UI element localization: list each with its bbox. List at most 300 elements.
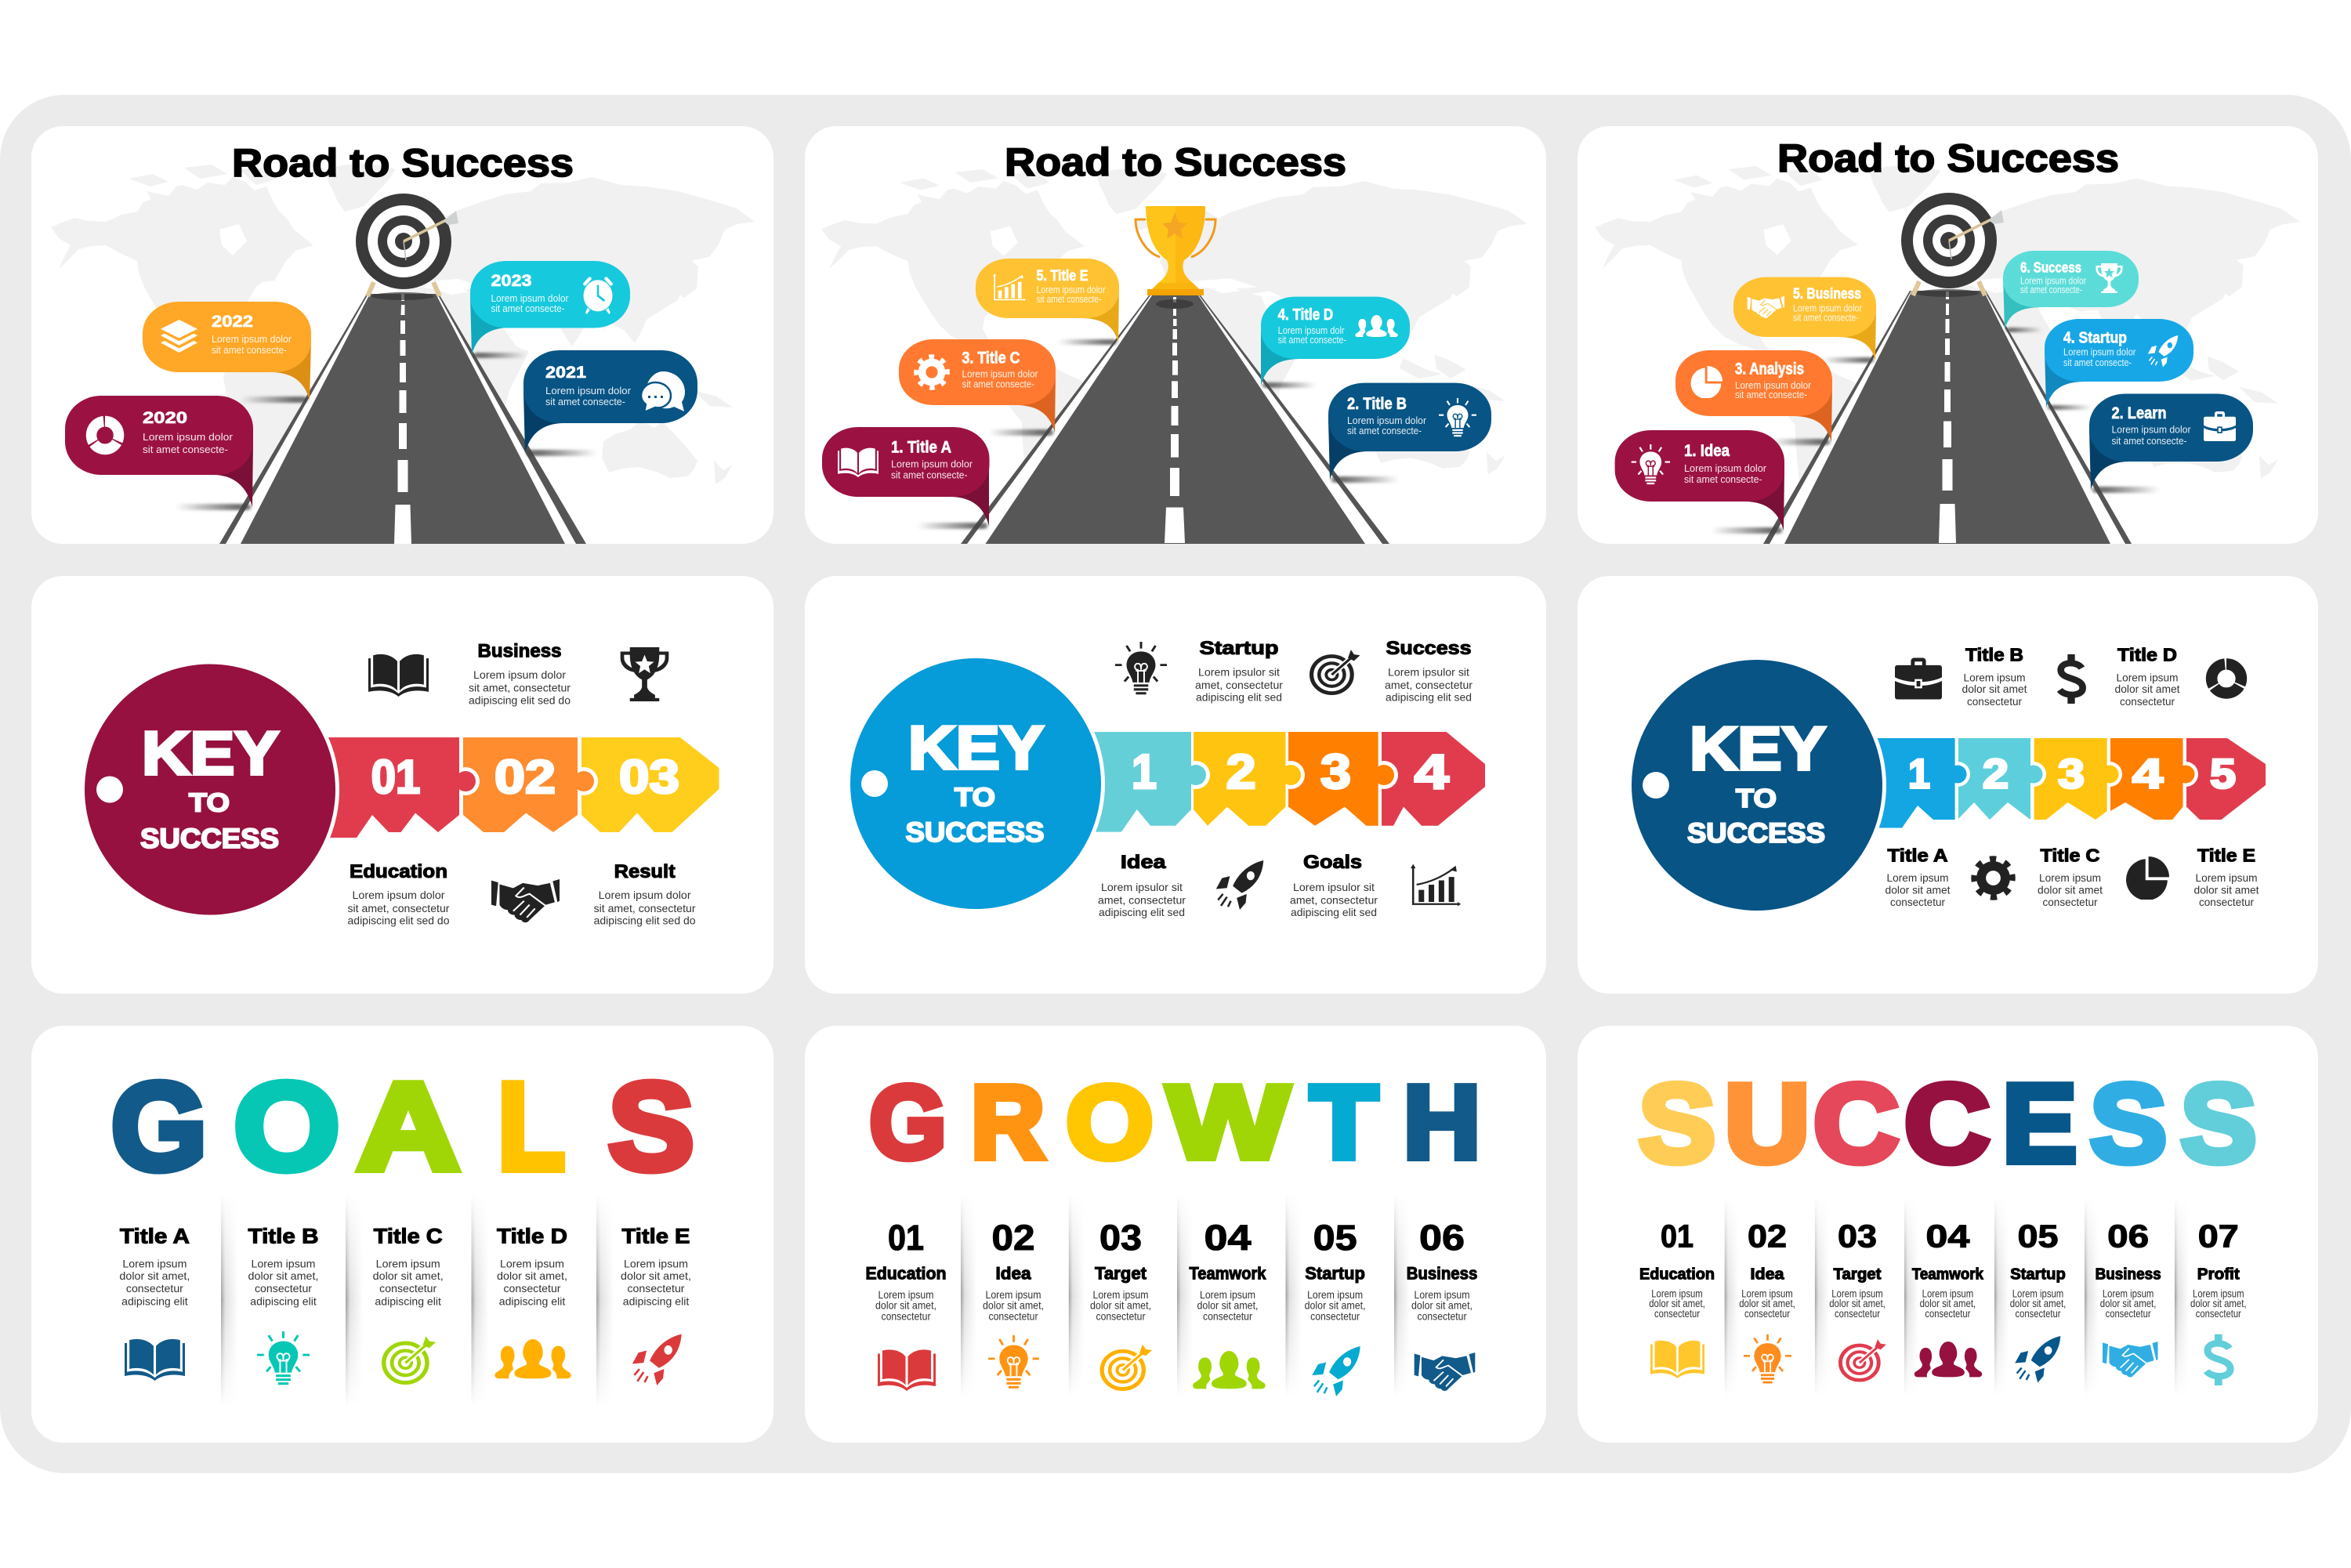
column: 06 business: 06 [1419, 1218, 1465, 1258]
icon: briefcase [1895, 658, 1942, 699]
column: 04 teamwork: Teamwork [1190, 1264, 1266, 1284]
column: 05 startup: Startup [2010, 1266, 2066, 1284]
text block: title E: Lorem ipsum [2196, 871, 2257, 884]
column: 03 target [1829, 1219, 1886, 1380]
text block: title A [1886, 845, 1951, 908]
column: 02 idea: Lorem ipsum [1741, 1287, 1793, 1299]
callout: startup [2045, 319, 2193, 410]
heading letters: GOALS: O [234, 1058, 340, 1196]
callout: title C: Lorem ipsum dolor [962, 368, 1038, 379]
column: title B: dolor sit amet, [248, 1269, 318, 1282]
text block: success: Success [1386, 638, 1472, 659]
text block: title A: dolor sit amet [1886, 884, 1951, 896]
text block: success: adipiscing elit sed [1386, 691, 1472, 704]
heading letters: GROWTH: H [1404, 1064, 1480, 1180]
column: 01 education: Education [865, 1264, 947, 1284]
text block: education [348, 861, 450, 926]
key head: SUCCESS [906, 817, 1044, 848]
column: 07 profit: Profit [2197, 1266, 2240, 1284]
column: 05 startup: dolor sit amet, [2010, 1297, 2066, 1309]
column: title E: Title E [622, 1224, 690, 1248]
heading letters: SUCCESS: S [1639, 1061, 1715, 1186]
column: 01 education: consectetur [1654, 1307, 1700, 1320]
key shaft [1628, 656, 2266, 914]
key head [1632, 660, 1882, 911]
column: 03 target: consectetur [1835, 1307, 1880, 1320]
road [961, 295, 1389, 544]
heading letters: GOALS: A [357, 1058, 459, 1196]
icon: pie [2126, 856, 2169, 900]
text block: business: Lorem ipsum dolor [473, 668, 566, 681]
panel: road to success with trophy [805, 126, 1546, 544]
callout: business: Lorem ipsum dolor [1793, 302, 1863, 313]
text block: success: amet, consectetur [1385, 679, 1473, 691]
text block: goals [1290, 852, 1378, 918]
callout: analysis: 3. Analysis [1735, 360, 1804, 378]
column: 01 education: dolor sit amet, [875, 1299, 936, 1312]
column: 01 education: 01 [1661, 1219, 1694, 1255]
callout: 2021: Lorem ipsum dolor [545, 385, 632, 397]
heading letters: GROWTH: T [1310, 1064, 1378, 1180]
column: 02 idea: 02 [1748, 1219, 1787, 1255]
icon: dollar [2059, 654, 2083, 704]
key head: KEY [142, 719, 279, 788]
column: 01 education: Lorem ipsum [878, 1288, 934, 1301]
heading: Road to Success [1005, 140, 1346, 184]
column: 07 profit [2190, 1219, 2247, 1385]
target icon [1901, 193, 2004, 295]
column: 07 profit: 07 [2198, 1219, 2239, 1255]
text block: title A: Lorem ipsum [1887, 871, 1948, 884]
callout: 2023: sit amet consecte- [491, 302, 564, 314]
column: title D: consectetur [503, 1282, 561, 1295]
road [219, 292, 586, 544]
column: title A: Title A [120, 1224, 190, 1248]
column: title E: dolor sit amet, [621, 1269, 691, 1282]
callout: title D [1261, 297, 1410, 388]
column: 07 profit: Lorem ipsum [2193, 1287, 2244, 1299]
text block: title E: Title E [2197, 845, 2255, 865]
key head: KEY [908, 713, 1044, 782]
column: 05 startup: Lorem ipsum [2012, 1287, 2063, 1299]
heading letters: GROWTH: O [1066, 1064, 1154, 1180]
callout: title A [822, 427, 989, 529]
column: title E: adipiscing elit [623, 1295, 689, 1308]
heading letters: SUCCESS: E [2002, 1061, 2077, 1186]
callout: title D: Lorem ipsum dolr [1278, 324, 1345, 336]
callout: title A: Lorem ipsum dolor [891, 458, 973, 469]
column: 06 business: Lorem ipsum [2103, 1287, 2154, 1299]
column: 02 idea: consectetur [1744, 1307, 1790, 1320]
column: 05 startup [1305, 1218, 1366, 1396]
text block: result: adipiscing elit sed do [594, 914, 696, 926]
text block: title D: Lorem ipsum [2116, 671, 2179, 683]
text block: title D: consectetur [2120, 695, 2175, 708]
heading letters: GOALS: G [111, 1058, 207, 1196]
column: 03 target: Lorem ipsum [1831, 1287, 1883, 1299]
text block: education: Education [350, 861, 447, 882]
column: title D: adipiscing elit [499, 1295, 565, 1308]
column: title A: dolor sit amet, [119, 1269, 190, 1282]
key shaft: 4 [1415, 745, 1449, 799]
text block: title C: Title C [2041, 845, 2100, 865]
text block: title B: consectetur [1967, 695, 2022, 708]
text block: title A: consectetur [1890, 896, 1945, 908]
text block: startup: amet, consectetur [1195, 679, 1283, 691]
key shaft: 03 [619, 751, 679, 803]
key head: TO [189, 788, 230, 817]
callout: 2023: 2023 [491, 272, 531, 290]
key shaft: 1 [1132, 745, 1157, 799]
column: 01 education: Lorem ipsum [1651, 1287, 1703, 1299]
column: 07 profit: dolor sit amet, [2190, 1297, 2247, 1309]
column: 03 target [1090, 1218, 1152, 1389]
callout: success: Lorem ipsum dolor [2020, 274, 2087, 287]
callout: title A: sit amet consecte- [891, 469, 967, 481]
text block: idea [1098, 852, 1186, 918]
column: title D: Lorem ipsum [500, 1257, 564, 1269]
column: 04 teamwork: Lorem ipsum [1200, 1288, 1255, 1301]
text block: goals: adipiscing elit sed [1291, 906, 1377, 918]
heading letters: GOALS: L [498, 1058, 565, 1196]
column: 03 target: Target [1834, 1266, 1882, 1284]
column: title C: Title C [374, 1224, 443, 1248]
text block: business: Business [478, 641, 561, 661]
key shaft: 1 [1908, 751, 1930, 798]
text block: title A: Title A [1887, 845, 1948, 865]
panel: growth [805, 1026, 1546, 1443]
text block: idea: Idea [1121, 852, 1166, 873]
column: 06 business: dolor sit amet, [2100, 1297, 2156, 1309]
callout: learn: sit amet consecte- [2111, 435, 2186, 447]
callout: title D: sit amet consecte- [1278, 334, 1346, 346]
callout: title E: sit amet consecte- [1036, 293, 1102, 305]
column: 01 education: 01 [888, 1218, 924, 1258]
column: title B [248, 1224, 318, 1385]
panel: road to success with target, years [31, 126, 773, 544]
column: 04 teamwork: 04 [1925, 1219, 1970, 1255]
icon: cycle [2212, 664, 2241, 693]
text block: success [1385, 638, 1473, 704]
callout: title B [1328, 383, 1491, 483]
icon: trophy [621, 647, 668, 701]
column: 05 startup [2010, 1219, 2066, 1382]
callout: business [1733, 277, 1876, 363]
column: title C: consectetur [379, 1282, 437, 1295]
key head: SUCCESS [140, 824, 279, 854]
text block: success: Lorem ipsulor sit [1388, 666, 1469, 679]
heading letters: GOALS: S [608, 1058, 694, 1196]
key shaft: 2 [1983, 751, 2009, 798]
heading letters: GOALS [111, 1058, 694, 1196]
text block: startup: adipiscing elit sed [1196, 691, 1282, 704]
column: title D: Title D [497, 1224, 567, 1248]
icon: book [368, 654, 429, 697]
heading letters: SUCCESS: U [1724, 1061, 1810, 1186]
column: 05 startup: Startup [1305, 1264, 1365, 1284]
callout: analysis: Lorem ipsum dolor [1735, 379, 1812, 391]
column: 04 teamwork: 04 [1204, 1218, 1251, 1258]
column: 03 target: dolor sit amet, [1090, 1299, 1151, 1312]
callout: 2023: Lorem ipsum dolor [491, 292, 569, 304]
column: 02 idea: dolor sit amet, [1739, 1297, 1795, 1309]
heading letters: GROWTH: W [1168, 1064, 1289, 1180]
text block: title C: consectetur [2042, 896, 2098, 908]
column: 04 teamwork: dolor sit amet, [1197, 1299, 1259, 1312]
key shaft: 01 [371, 751, 420, 803]
column: 04 teamwork [1912, 1219, 1984, 1377]
text block: result: Lorem ipsum dolor [599, 889, 691, 901]
text block: goals: Lorem ipsulor sit [1293, 881, 1375, 893]
column: 04 teamwork: dolor sit amet, [1920, 1297, 1976, 1309]
column: 06 business: consectetur [1417, 1310, 1467, 1323]
key shaft [846, 654, 1485, 913]
callout: idea [1615, 430, 1784, 534]
column: 04 teamwork: Teamwork [1912, 1266, 1984, 1284]
text block: title B: Lorem ipsum [1964, 671, 2025, 683]
column: 03 target: Lorem ipsum [1092, 1288, 1149, 1301]
column: 05 startup: Lorem ipsum [1307, 1288, 1363, 1301]
callout: 2022: sit amet consecte- [212, 344, 287, 356]
callout: 2021 [523, 350, 697, 456]
callout: success [2003, 251, 2139, 332]
heading: Road to Success [232, 141, 574, 185]
heading letters: GROWTH: R [971, 1064, 1045, 1180]
column: 04 teamwork: consectetur [1925, 1307, 1971, 1320]
column: 05 startup: 05 [1313, 1218, 1357, 1258]
road [1763, 289, 2132, 544]
text block: title D: Title D [2117, 645, 2177, 665]
callout: success: 6. Success [2020, 260, 2081, 276]
column: 01 education: consectetur [881, 1310, 931, 1323]
key shaft: 5 [2210, 751, 2236, 798]
column: title D [494, 1224, 571, 1378]
text block: startup: Startup [1199, 638, 1279, 659]
callout: title A: 1. Title A [891, 439, 951, 456]
column: 02 idea: dolor sit amet, [983, 1299, 1044, 1312]
text block: title C [2038, 845, 2103, 908]
column: 02 idea [1739, 1219, 1795, 1384]
key head: KEY [1690, 714, 1826, 783]
callout: title D: 4. Title D [1278, 306, 1333, 324]
callout: startup: Lorem ipsum dolor [2063, 346, 2136, 358]
text block: goals: Goals [1303, 852, 1362, 873]
text block: title E [2194, 845, 2259, 908]
key shaft: 3 [2058, 751, 2085, 798]
column: title C: Lorem ipsum [376, 1257, 440, 1269]
icon: rocket [1216, 860, 1263, 910]
callout: business: sit amet consecte- [1793, 312, 1859, 324]
column: 06 business [2096, 1219, 2161, 1378]
column: 01 education: dolor sit amet, [1649, 1297, 1705, 1309]
column: 03 target: dolor sit amet, [1829, 1297, 1886, 1309]
text block: idea: amet, consectetur [1098, 894, 1186, 907]
column: 06 business: Business [2096, 1266, 2161, 1284]
text block: goals: amet, consectetur [1290, 894, 1378, 907]
heading letters: SUCCESS: S [2090, 1061, 2167, 1186]
heading letters: GROWTH: G [870, 1064, 947, 1180]
callout: 2022 [143, 302, 311, 403]
callout: title E: 5. Title E [1036, 268, 1088, 284]
callout: analysis [1675, 350, 1832, 445]
callout: idea: Lorem ipsum dolor [1684, 462, 1767, 474]
column: title B: consectetur [255, 1282, 312, 1295]
key head: TO [1736, 784, 1777, 813]
text block: title B [1962, 645, 2027, 708]
column: 06 business: dolor sit amet, [1411, 1299, 1473, 1312]
callout: 2020: sit amet consecte- [143, 444, 228, 455]
text block: title B: Title B [1965, 645, 2023, 665]
column: 03 target: 03 [1838, 1219, 1877, 1255]
column: title C: adipiscing elit [375, 1295, 441, 1308]
column: title C [373, 1224, 444, 1382]
callout: learn: Lorem ipsum dolor [2111, 423, 2191, 436]
text block: title C: Lorem ipsum [2039, 871, 2101, 884]
column: title B: adipiscing elit [250, 1295, 317, 1308]
target icon [356, 194, 458, 296]
column: 06 business: Lorem ipsum [1414, 1288, 1470, 1301]
text block: startup: Lorem ipsulor sit [1198, 666, 1280, 679]
panel: key to success with 5 steps [1578, 576, 2318, 994]
text block: result: Result [614, 861, 676, 882]
text block: startup [1195, 638, 1283, 704]
column: 02 idea: 02 [992, 1218, 1034, 1258]
panel: key to success with 3 steps [31, 576, 773, 994]
column: title B: Title B [248, 1224, 318, 1248]
callout: 2023 [470, 261, 630, 358]
callout: title C [899, 339, 1056, 436]
column: 05 startup: consectetur [1310, 1310, 1360, 1323]
text block: title C: dolor sit amet [2038, 884, 2103, 896]
key head [85, 664, 335, 915]
key head: SUCCESS [1687, 818, 1825, 849]
callout: analysis: sit amet consecte- [1735, 389, 1807, 400]
column: 03 target: Target [1095, 1264, 1147, 1284]
callout: title B: 2. Title B [1347, 395, 1407, 413]
text block: education: adipiscing elit sed do [348, 914, 450, 926]
icon: gear [1971, 856, 2016, 900]
icon: chart [1411, 864, 1461, 906]
column: 04 teamwork [1190, 1218, 1266, 1389]
callout: 2022: Lorem ipsum dolor [212, 333, 292, 345]
column: 01 education [865, 1218, 947, 1391]
key shaft: 3 [1320, 745, 1351, 799]
column: title E: consectetur [627, 1282, 685, 1295]
key shaft [81, 660, 719, 918]
column: title A: consectetur [126, 1282, 183, 1295]
heading letters: SUCCESS [1639, 1061, 2257, 1186]
column: title E: Lorem ipsum [624, 1257, 688, 1269]
text block: title D [2114, 645, 2180, 708]
heading letters: SUCCESS: C [1904, 1061, 1990, 1186]
callout: success: sit amet consecte- [2020, 284, 2082, 295]
callout: 2020: 2020 [143, 409, 187, 427]
callout: startup: sit amet consecte- [2063, 357, 2132, 368]
callout: learn [2089, 393, 2253, 493]
callout: idea: 1. Idea [1684, 442, 1730, 460]
column: 03 target: 03 [1099, 1218, 1142, 1258]
callout: title C: sit amet consecte- [962, 378, 1034, 390]
text block: business [469, 641, 571, 707]
text block: business: adipiscing elit sed do [469, 694, 571, 707]
column: 02 idea: consectetur [989, 1310, 1038, 1323]
panel: success [1578, 1026, 2318, 1443]
text block: education: Lorem ipsum dolor [353, 889, 445, 901]
text block: education: sit amet, consectetur [348, 902, 450, 914]
callout: idea: sit amet consecte- [1684, 473, 1762, 485]
callout: 2022: 2022 [212, 313, 253, 331]
text block: business: sit amet, consectetur [469, 682, 571, 694]
icon: chat [641, 371, 685, 412]
callout: title C: 3. Title C [962, 349, 1020, 368]
column: 06 business: consectetur [2106, 1307, 2151, 1320]
key shaft: 4 [2132, 751, 2164, 798]
column: 03 target: consectetur [1096, 1310, 1146, 1323]
column: 02 idea: Idea [1751, 1266, 1784, 1284]
column: 06 business: Business [1407, 1264, 1477, 1284]
key shaft: 02 [494, 751, 556, 803]
column: 07 profit: consectetur [2196, 1307, 2241, 1320]
column: 05 startup: dolor sit amet, [1305, 1299, 1366, 1312]
heading letters: SUCCESS: S [2180, 1061, 2257, 1186]
column: title B: Lorem ipsum [251, 1257, 315, 1269]
column: 02 idea: Lorem ipsum [986, 1288, 1041, 1301]
column: 01 education [1639, 1219, 1715, 1378]
column: 06 business: 06 [2107, 1219, 2149, 1255]
column: 05 startup: consectetur [2016, 1307, 2061, 1320]
column: title D: dolor sit amet, [497, 1269, 567, 1282]
icon: gold trophy [1136, 206, 1215, 295]
text block: idea: Lorem ipsulor sit [1101, 881, 1183, 893]
column: title A: Lorem ipsum [122, 1257, 187, 1269]
column: 04 teamwork: Lorem ipsum [1922, 1287, 1973, 1299]
text block: result: sit amet, consectetur [594, 902, 696, 914]
column: 02 idea: Idea [995, 1264, 1031, 1284]
text block: title E: dolor sit amet [2194, 884, 2259, 896]
column: title C: dolor sit amet, [373, 1269, 444, 1282]
key head [850, 658, 1101, 909]
callout: 2020 [65, 396, 253, 510]
key shaft: 2 [1226, 745, 1256, 799]
callout: title B: sit amet consecte- [1347, 425, 1422, 436]
text block: idea: adipiscing elit sed [1099, 906, 1185, 918]
text block: result [594, 861, 696, 926]
column: title A [119, 1224, 190, 1381]
column: 06 business [1407, 1218, 1477, 1391]
heading letters: SUCCESS: C [1813, 1061, 1899, 1186]
column: title E [621, 1224, 691, 1385]
icon: target [1312, 650, 1360, 693]
column: 05 startup: 05 [2017, 1219, 2058, 1255]
panel: goals [31, 1026, 773, 1443]
callout: startup: 4. Startup [2063, 329, 2127, 346]
column: 01 education: Education [1639, 1266, 1715, 1284]
text block: title B: dolor sit amet [1962, 683, 2027, 695]
column: title A: adipiscing elit [121, 1295, 188, 1308]
callout: title E [976, 259, 1119, 345]
icon: handshake [491, 879, 560, 922]
callout: 2021: sit amet consecte- [545, 396, 625, 407]
panel: key to success with 4 steps [805, 576, 1546, 994]
text block: title D: dolor sit amet [2114, 683, 2180, 695]
key head: TO [955, 783, 995, 812]
callout: title E: Lorem ipsum dolor [1036, 284, 1106, 295]
column: 02 idea [983, 1218, 1044, 1389]
text block: title E: consectetur [2199, 896, 2254, 908]
callout: business: 5. Business [1793, 286, 1861, 302]
callout: 2020: Lorem ipsum dolor [143, 431, 234, 443]
panel: road to success with six stops [1578, 126, 2318, 544]
